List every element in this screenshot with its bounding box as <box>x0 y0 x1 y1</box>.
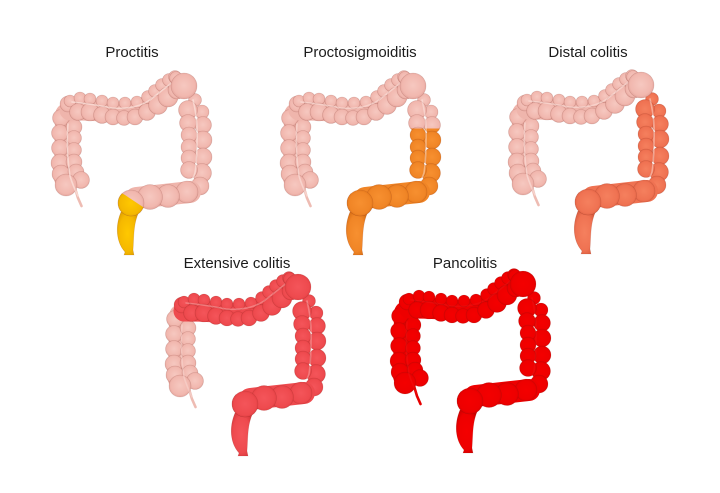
heading: distal colitis: Distal colitis <box>548 44 628 61</box>
colon diagram: rectum affected <box>51 70 212 255</box>
colon diagram: rectum and sigmoid affected <box>280 70 441 255</box>
colon diagram: whole colon affected <box>390 268 551 453</box>
heading: pancolitis: Pancolitis <box>433 255 497 272</box>
heading: extensive colitis: Extensive colitis <box>184 255 290 272</box>
panel: extensive colitis <box>165 255 326 456</box>
heading: proctosigmoiditis: Proctosigmoiditis <box>303 44 417 61</box>
panel: proctitis <box>51 44 212 255</box>
heading: proctitis: Proctitis <box>105 44 159 61</box>
panel: proctosigmoiditis <box>280 44 441 255</box>
panel: pancolitis <box>390 255 551 453</box>
colon diagram: descending colon affected <box>508 70 669 254</box>
panel: distal colitis <box>508 44 669 254</box>
colon diagram: transverse colon onward affected <box>165 272 326 456</box>
